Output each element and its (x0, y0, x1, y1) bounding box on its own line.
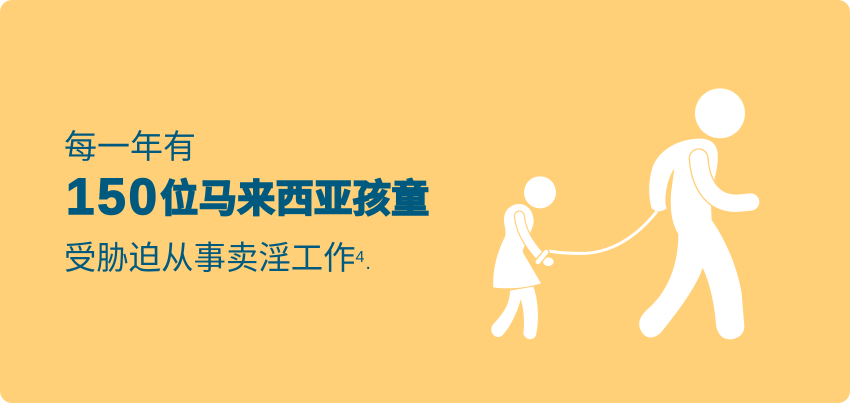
number: 150: 150 (66, 168, 157, 225)
text: closing line with footnote: 受胁迫从事卖淫工作 (64, 240, 356, 276)
text: closing line with footnote: . (365, 252, 371, 274)
icon: rope (548, 212, 657, 253)
icon: child figure (491, 176, 556, 339)
text: intro line: 每一年有 (64, 128, 196, 165)
text: closing line with footnote: 4 (356, 249, 365, 266)
child arm outline (519, 216, 539, 255)
child dress (493, 204, 541, 288)
child arm (519, 216, 539, 255)
child hand (543, 257, 554, 266)
wrist cuff (534, 248, 550, 266)
adult head (695, 88, 745, 138)
text block: statistic (64, 128, 430, 276)
adult arm outline (699, 158, 751, 203)
child head (524, 176, 556, 208)
adult body and legs (639, 139, 744, 339)
icon: adult figure (639, 88, 751, 339)
illustration: adult leading child on a rope (491, 88, 751, 339)
adult arm (699, 158, 751, 203)
text: Malaysian children: 位马来西亚孩童 (160, 178, 430, 221)
heading: 150 Malaysian children (66, 168, 430, 225)
child legs (491, 287, 538, 339)
